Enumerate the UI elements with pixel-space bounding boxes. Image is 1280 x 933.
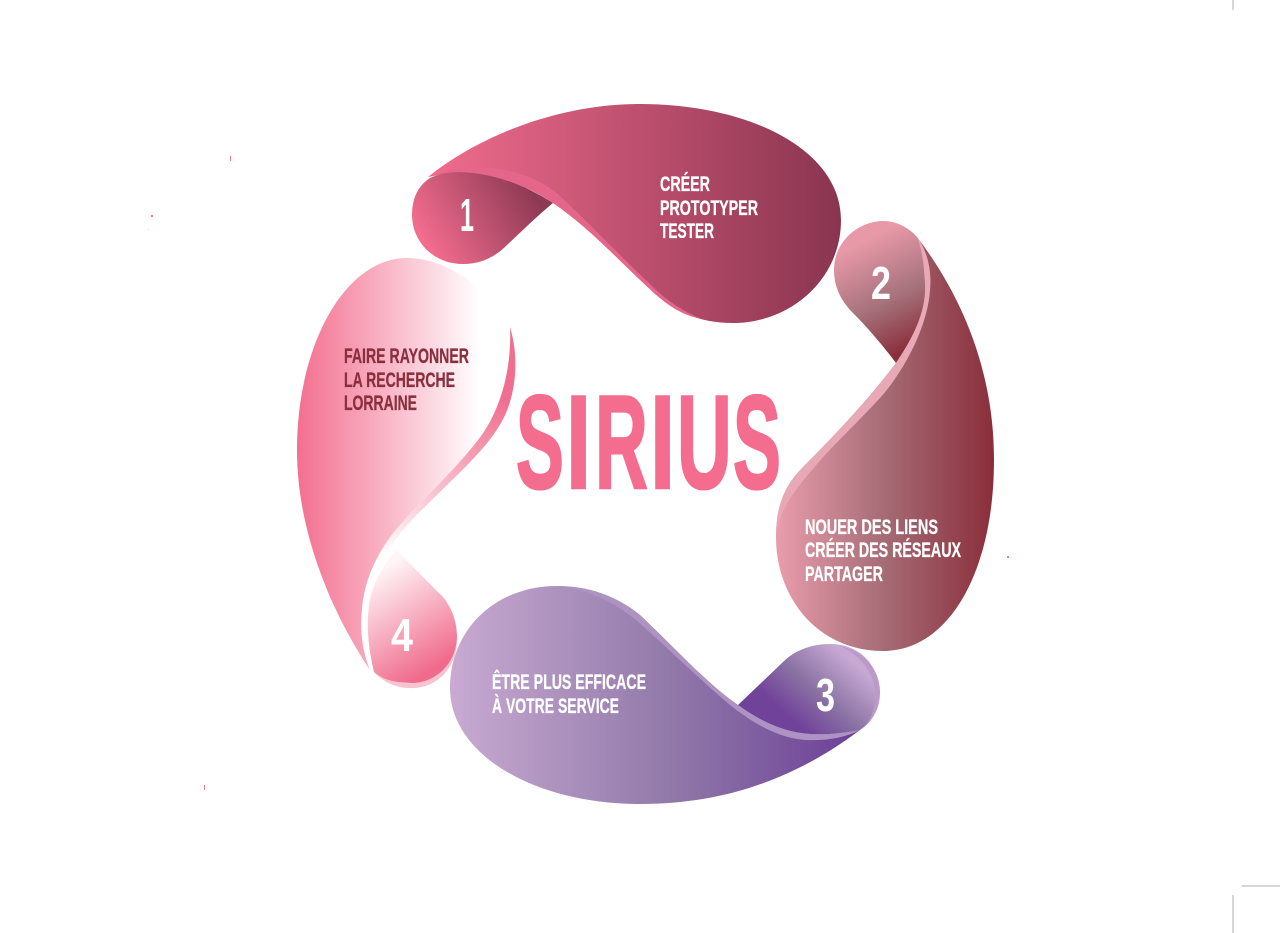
title: S	[733, 367, 781, 517]
text: step 2	[805, 516, 961, 586]
fold band 2	[776, 237, 930, 537]
title: S	[516, 367, 564, 517]
stray specks	[148, 156, 1009, 790]
text: step 1: CRÉER	[660, 173, 710, 196]
text: step 2: CRÉER DES RÉSEAUX	[805, 539, 961, 562]
petal body 1	[428, 104, 841, 323]
petal body 2	[776, 237, 994, 651]
fold drop 1	[412, 172, 553, 264]
fold band 4	[361, 327, 515, 673]
petal body 3	[450, 586, 860, 804]
fold band 1	[428, 167, 702, 319]
panel: step 4 petal	[297, 258, 515, 688]
text: step 1	[660, 173, 758, 243]
text: step 3: À VOTRE SERVICE	[492, 695, 619, 718]
rim of drop 3	[840, 646, 880, 730]
panel: step 3 petal	[450, 586, 880, 804]
fold drop 2	[834, 221, 925, 363]
panel: step 2 petal	[776, 221, 994, 651]
text: step 4	[344, 345, 469, 415]
number 3: 3	[816, 669, 835, 721]
text: step 1: PROTOTYPER	[660, 197, 758, 220]
text: step 2: NOUER DES LIENS	[805, 516, 938, 539]
rim of drop 4	[374, 637, 457, 688]
number 4: 4	[391, 609, 413, 661]
petal body 4	[297, 258, 510, 670]
text: step 4: FAIRE RAYONNER	[344, 345, 469, 368]
number 1: 1	[460, 189, 474, 241]
text: step 2: PARTAGER	[805, 563, 883, 586]
fold band 3	[557, 586, 860, 740]
title	[516, 367, 781, 517]
fold drop 3	[738, 644, 879, 734]
panel: step 1 petal	[412, 104, 841, 323]
text: step 1: TESTER	[660, 220, 714, 243]
title: I	[566, 369, 591, 517]
fold drop 4	[368, 550, 457, 683]
text: step 3	[492, 670, 646, 718]
title: R	[595, 368, 648, 517]
title: U	[677, 368, 732, 516]
text: step 4: LA RECHERCHE	[344, 369, 455, 392]
crop marks	[1233, 0, 1280, 933]
text: step 3: ÊTRE PLUS EFFICACE	[492, 670, 646, 694]
title: I	[650, 369, 675, 517]
number 2: 2	[871, 257, 891, 309]
text: step 4: LORRAINE	[344, 392, 417, 415]
